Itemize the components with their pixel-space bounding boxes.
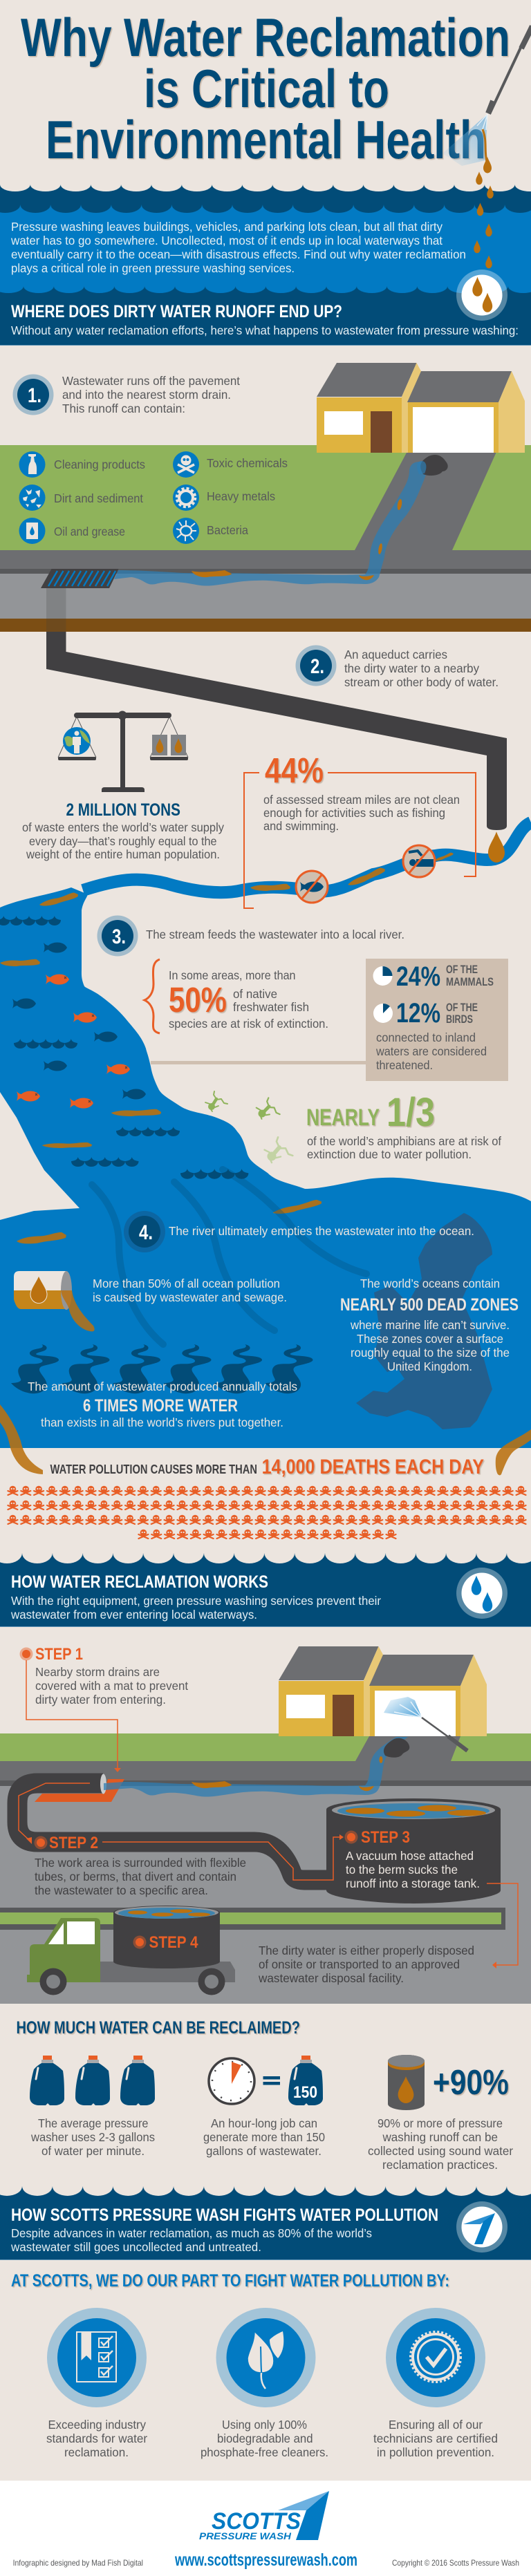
text: gallons per minute: The average pressure <box>38 2116 148 2130</box>
step 4: The dirty water is either properly disposed <box>259 1944 474 1957</box>
icon: oil barrel <box>19 518 46 544</box>
stat: dead zones: roughly equal to the size of the <box>351 1346 510 1360</box>
designer credit: Infographic designed by Mad Fish Digital <box>13 2558 143 2568</box>
driveway <box>355 453 496 550</box>
drip from pipe <box>488 831 505 863</box>
step 3: STEP 3 <box>361 1828 410 1847</box>
step 4: STEP 4 <box>149 1933 198 1952</box>
stat: ocean pollution: More than 50% of all ocean pollution <box>93 1277 280 1290</box>
text: 90 percent collected: reclamation practices. <box>382 2158 498 2172</box>
step 2 text: stream or other body of water. <box>344 675 499 689</box>
icon: frogs <box>205 1091 295 1165</box>
aqueduct pipe <box>46 588 507 830</box>
text: biodegradable cleaners: biodegradable and <box>217 2432 313 2445</box>
stat: dead zones: These zones cover a surface <box>357 1332 503 1346</box>
stat: nearly one third <box>306 1090 501 1161</box>
step 3 text: The stream feeds the wastewater into a local river. <box>146 928 404 941</box>
step 2 text: the dirty water to a nearby <box>344 661 479 675</box>
step 2 <box>19 1783 344 1897</box>
stat: six times more water <box>28 1380 297 1429</box>
icon: bacteria <box>173 518 199 544</box>
step 4: of onsite or transported to an approved <box>259 1957 460 1971</box>
stat: 2 million tons: of waste enters the world’s water supply <box>22 820 224 834</box>
stat: 2 million tons <box>22 800 224 861</box>
heading: how water reclamation works: wastewater from ever entering local waterways. <box>10 1608 257 1621</box>
icon: scale <box>58 711 188 792</box>
step 2 badge <box>296 646 336 686</box>
stat: 44 percent: and swimming. <box>263 819 339 833</box>
text: gallons per minute: of water per minute. <box>41 2144 145 2158</box>
icon: barrel plus 90 percent <box>388 2055 509 2110</box>
stat: 50 percent of fish: 50% <box>169 980 227 1019</box>
text: certified technicians: in pollution prevention. <box>377 2445 494 2459</box>
step 4 text: The river ultimately empties the wastewater into the ocean. <box>169 1224 474 1238</box>
label: toxic chemicals: Toxic chemicals <box>207 456 288 470</box>
text: exceeding standards <box>46 2418 147 2459</box>
intro text <box>10 220 466 275</box>
heading: how scotts fights: wastewater still goes uncollected and untreated. <box>10 2240 261 2254</box>
text: 90 percent collected: 90% or more of pressure <box>378 2116 503 2130</box>
stat: 50 percent of fish <box>145 959 328 1033</box>
stat: 12 percent birds: BIRDS <box>446 1013 473 1026</box>
label: dirt and sediment: Dirt and sediment <box>54 491 143 505</box>
mat over storm drain <box>35 1779 124 1802</box>
step 4 <box>133 1883 518 1985</box>
stat: 24 percent mammals <box>396 961 494 992</box>
text: hour-long job: An hour-long job can <box>211 2116 317 2130</box>
list: runoff contaminants <box>19 451 288 544</box>
label: heavy metals: Heavy metals <box>207 489 275 503</box>
stat: dead zones <box>340 1277 519 1373</box>
house with pressure washer <box>279 1646 487 1751</box>
heading: how water reclamation works: HOW WATER RECLAMATION WORKS <box>11 1572 268 1592</box>
step 4 badge: 4. <box>139 1221 153 1244</box>
icon: clock equals 150 jug <box>209 2056 323 2105</box>
icon: gear <box>173 485 199 511</box>
icon: clean drops in circle <box>456 1568 507 1619</box>
icon: certified seal <box>386 2308 485 2407</box>
title <box>21 7 510 170</box>
icon: falling dirty drops <box>474 171 494 268</box>
heading: how scotts fights: Despite advances in water reclamation, as much as 80% of the world’s <box>11 2226 372 2240</box>
stat: six times more water: 6 TIMES MORE WATER <box>83 1396 238 1416</box>
pie: 24 percent <box>373 966 393 986</box>
step 2: the wastewater to a specific area. <box>35 1883 208 1897</box>
stat: 2 million tons: weight of the entire human population. <box>26 847 220 861</box>
truck <box>27 1906 235 1995</box>
intro text: eventually carry it to the ocean—with disastrous effects. Find out why water reclamation <box>11 247 466 261</box>
text: certified technicians: Ensuring all of our <box>389 2418 483 2432</box>
heading: how water reclamation works: With the right equipment, green pressure washing services prevent their <box>11 1594 381 1608</box>
stat: 50 percent of fish: freshwater fish <box>233 1000 309 1014</box>
step 2 badge: 2. <box>310 655 324 678</box>
stream and river <box>0 822 531 1448</box>
threatened text: waters are considered <box>375 1044 487 1058</box>
step 1 text: This runoff can contain: <box>62 402 185 415</box>
heading: where does runoff end up <box>11 302 519 337</box>
icon: checklist <box>47 2308 147 2407</box>
logo: scotts pressure wash: SCOTTS <box>212 2508 301 2535</box>
text: 90 percent collected: collected using sound water <box>368 2144 513 2158</box>
stat: 2 million tons: every day—that’s roughly equal to the <box>29 834 217 848</box>
step 2: tubes, or berms, that divert and contain <box>35 1870 236 1883</box>
step 1 text: Wastewater runs off the pavement <box>62 374 240 388</box>
text: exceeding standards: Exceeding industry <box>48 2418 146 2432</box>
step 1 badge <box>12 375 54 415</box>
intro text: Pressure washing leaves buildings, vehicles, and parking lots clean, but all that dirty <box>11 220 442 234</box>
icon: dirty drops in circle <box>456 270 507 321</box>
icon: leaves <box>216 2308 315 2407</box>
step 3 badge <box>97 915 138 957</box>
label: bacteria: Bacteria <box>207 523 248 537</box>
threatened text <box>375 1031 487 1072</box>
fish and waves in the river <box>0 916 248 1179</box>
website url: www.scottspressurewash.com <box>174 2550 357 2570</box>
icon rows: skulls <box>6 1484 528 1542</box>
stat: ocean pollution: is caused by wastewater and sewage. <box>93 1290 287 1304</box>
icon: wastewater wisps <box>11 1344 313 1393</box>
text: hour-long job: generate more than 150 <box>203 2130 325 2144</box>
heading: how scotts fights: HOW SCOTTS PRESSURE WASH FIGHTS WATER POLLUTION <box>11 2206 438 2225</box>
icon: scotts arrow in circle <box>456 2201 507 2253</box>
step 1 text: and into the nearest storm drain. <box>62 388 231 402</box>
intro text: water has to go somewhere. Uncollected, most of it ends up in local waterways that <box>10 234 442 247</box>
stat: nearly one third: of the world’s amphibians are at risk of <box>307 1134 501 1148</box>
step 1: dirty water from entering. <box>35 1693 166 1707</box>
step 4: wastewater disposal facility. <box>258 1971 404 1985</box>
icon: clock equals 150 jug: 150 <box>293 2083 317 2102</box>
step 1 badge: 1. <box>28 384 41 407</box>
step 3 <box>344 1828 480 1890</box>
step 2: STEP 2 <box>49 1834 98 1852</box>
label: oil and grease: Oil and grease <box>54 525 125 538</box>
dirty water side streams <box>0 1404 531 1475</box>
title: is Critical to <box>144 58 389 119</box>
heading: where does runoff end up: WHERE DOES DIRTY WATER RUNOFF END UP? <box>11 302 342 321</box>
panel: ground layers <box>0 445 531 632</box>
oil slicks on stream and river <box>0 852 454 1245</box>
stat: six times more water: The amount of wastewater produced annually totals <box>28 1380 297 1393</box>
stat: dead zones: The world’s oceans contain <box>360 1277 500 1290</box>
stat: nearly one third: extinction due to water pollution. <box>307 1147 472 1161</box>
pie: 12 percent <box>373 1004 393 1023</box>
heading: how much water can be reclaimed: HOW MUCH WATER CAN BE RECLAIMED? <box>17 2018 300 2038</box>
panel: how scotts fights water pollution <box>0 2186 531 2260</box>
step 2 text: An aqueduct carries <box>344 648 447 661</box>
house <box>317 363 525 453</box>
stat: 44 percent: enough for activities such as fishing <box>263 806 445 820</box>
ocean currents <box>92 1169 366 1344</box>
stat: nearly one third: NEARLY <box>306 1104 380 1131</box>
stat: 12 percent birds: OF THE <box>446 1001 478 1014</box>
stat: 12 percent birds: 12% <box>396 998 440 1028</box>
stat: dead zones: where marine life can’t survive. <box>350 1318 510 1332</box>
stat: 24 percent mammals: OF THE <box>446 963 478 976</box>
text: biodegradable cleaners <box>201 2418 328 2459</box>
icon: three jugs <box>30 2056 155 2105</box>
step 1: STEP 1 <box>35 1645 83 1664</box>
stat: dead zones: United Kingdom. <box>387 1360 472 1373</box>
step 2 text <box>344 648 499 689</box>
step 1: Nearby storm drains are <box>35 1665 160 1679</box>
icon: pressure washer wand with spray and dirty drip <box>442 26 531 173</box>
text: hour-long job: gallons of wastewater. <box>206 2144 322 2158</box>
stat: deaths each day: 14,000 DEATHS EACH DAY <box>262 1456 484 1478</box>
step 2: The work area is surrounded with flexible <box>35 1856 246 1870</box>
label: cleaning products: Cleaning products <box>54 458 145 471</box>
text: gallons per minute <box>30 2116 155 2158</box>
icon: no swimming <box>403 845 435 877</box>
text: 90 percent collected <box>368 2116 513 2172</box>
text: 90 percent collected: washing runoff can be <box>382 2130 498 2144</box>
heading: how water reclamation works <box>10 1572 381 1621</box>
step 3 badge: 3. <box>112 925 126 948</box>
text: gallons per minute: washer uses 2-3 gallons <box>30 2130 155 2144</box>
text: biodegradable cleaners: Using only 100% <box>222 2418 307 2432</box>
text: certified technicians: technicians are certified <box>373 2432 498 2445</box>
icon: spray bottle <box>19 451 46 478</box>
text: exceeding standards: reclamation. <box>64 2445 129 2459</box>
icon: barrel plus 90 percent: +90% <box>433 2062 509 2102</box>
step 3: to the berm sucks the <box>346 1863 458 1877</box>
panel: mammals and birds <box>151 959 508 1081</box>
step 1 <box>19 1645 188 1772</box>
stat: 2 million tons: 2 MILLION TONS <box>66 800 180 820</box>
text: certified technicians <box>373 2418 498 2459</box>
storage tank <box>326 1798 501 1903</box>
text: hour-long job <box>203 2116 325 2158</box>
dirty water flow <box>114 455 448 586</box>
text: biodegradable cleaners: phosphate-free cleaners. <box>201 2445 328 2459</box>
stat: six times more water: than exists in all the world’s rivers put together. <box>41 1416 283 1429</box>
heading: how scotts fights <box>10 2206 438 2254</box>
intro text: plays a critical role in green pressure washing services. <box>11 261 295 275</box>
heading: where does runoff end up: Without any water reclamation efforts, here’s what happens to wastewater from pressure washing: <box>11 323 519 337</box>
icon: skull and crossbones <box>173 451 199 478</box>
panel: work area ground <box>0 1733 531 2004</box>
threatened text: connected to inland <box>376 1031 476 1044</box>
icon: storm drain <box>41 569 119 588</box>
UK map silhouette <box>356 1213 492 1429</box>
step 3: A vacuum hose attached <box>346 1849 474 1863</box>
panel: how water reclamation works <box>0 1553 531 1627</box>
icon: spilling barrel <box>14 1271 95 1331</box>
stat: 44 percent <box>244 751 476 908</box>
panel: wave bands and intro <box>0 185 531 346</box>
stat: 50 percent of fish: In some areas, more than <box>169 968 296 982</box>
berm tube <box>17 1783 332 1880</box>
stat: 44 percent: of assessed stream miles are not clean <box>263 793 460 807</box>
threatened text: threatened. <box>376 1058 433 1072</box>
stat: 50 percent of fish: of native <box>233 987 277 1001</box>
stat: nearly one third: 1/3 <box>386 1090 435 1135</box>
logo: scotts pressure wash: PRESSURE WASH <box>199 2530 292 2541</box>
step 1 text <box>62 374 240 415</box>
stat: 24 percent mammals: 24% <box>396 961 440 992</box>
stat: 50 percent of fish: species are at risk of extinction. <box>169 1017 328 1031</box>
icon: dirt <box>19 485 46 511</box>
logo: scotts pressure wash <box>199 2491 329 2541</box>
dirty water flow <box>100 1737 409 1797</box>
step 4 badge <box>124 1211 165 1252</box>
step 3: runoff into a storage tank. <box>346 1877 480 1890</box>
icon: no fishing <box>296 871 328 903</box>
stat: deaths each day: WATER POLLUTION CAUSES MORE THAN <box>50 1463 257 1476</box>
footer panel <box>0 2481 531 2576</box>
stat: 12 percent birds <box>396 998 478 1028</box>
stat: 44 percent: 44% <box>265 751 324 790</box>
stat: ocean pollution <box>93 1277 287 1304</box>
text: exceeding standards: standards for water <box>46 2432 147 2445</box>
stat: deaths each day <box>50 1456 484 1478</box>
step 1: covered with a mat to prevent <box>35 1679 188 1693</box>
stat: 24 percent mammals: MAMMALS <box>446 975 494 988</box>
